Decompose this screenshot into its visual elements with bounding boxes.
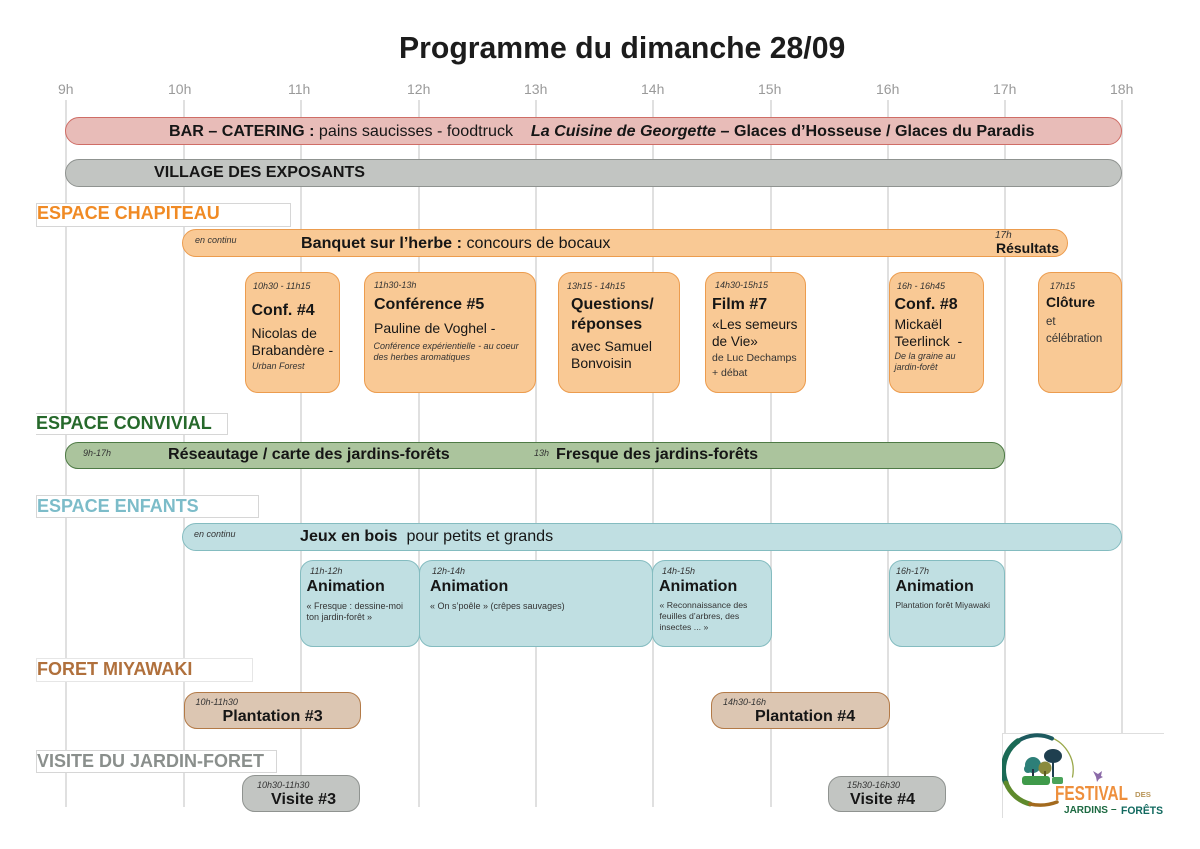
card: animation 12h: Animation — [430, 578, 508, 595]
card: animation 16h: Plantation forêt Miyawaki — [896, 600, 990, 610]
bar: jeux en bois: en continu — [194, 529, 236, 539]
heading: visite du jardin-foret: VISITE DU JARDIN-FORET — [37, 751, 264, 771]
hour labels: 14h — [641, 81, 664, 97]
heading: espace enfants — [36, 495, 259, 518]
pill: plantation 3 — [184, 692, 360, 729]
card: questions: réponses — [571, 316, 642, 333]
bar: banquet: en continu — [195, 235, 237, 245]
bar: banquet: Banquet sur l’herbe : concours de bocaux — [301, 234, 610, 252]
hour labels: 11h — [288, 81, 310, 97]
bar: jeux en bois: Jeux en bois pour petits et grands — [300, 527, 553, 545]
hour labels: 9h — [58, 81, 74, 97]
card: conf 5: des herbes aromatiques — [374, 352, 470, 362]
pill: visite 4: 15h30-16h30 — [847, 780, 900, 790]
hour labels: 16h — [876, 81, 899, 97]
logo text: JARDINS — [1064, 805, 1108, 816]
logo text: FORÊTS — [1121, 804, 1163, 817]
card: animation 12h: 12h-14h — [432, 566, 465, 576]
heading: espace enfants: ESPACE ENFANTS — [37, 496, 199, 516]
card: conf 5: Conférence expérientielle - au coeur — [374, 341, 519, 351]
heading: foret miyawaki: FORET MIYAWAKI — [37, 659, 192, 679]
bar: jeux en bois — [182, 523, 1122, 551]
card: conf 8 — [889, 272, 984, 393]
bar: village des exposants — [65, 159, 1122, 187]
heading: espace convivial: ESPACE CONVIVIAL — [36, 413, 212, 433]
bar: catering: BAR – CATERING : pains saucisses - foodtruck La Cuisine de Georgette – Glaces d’Hosseuse / Glaces du Paradis — [169, 122, 1035, 140]
card: film 7: Film #7 — [712, 296, 767, 313]
card: animation 11h: « Fresque : dessine-moi — [306, 601, 403, 611]
card: conf 5 — [364, 272, 536, 393]
icon: brush circle — [1003, 735, 1073, 805]
card: conf 4: Urban Forest — [252, 361, 305, 371]
card: conf 4 — [245, 272, 340, 393]
card: animation 12h: « On s’poêle » (crêpes sauvages) — [430, 601, 565, 611]
card: conf 8: De la graine au — [894, 351, 956, 361]
card: film 7: de Vie» — [712, 334, 758, 349]
bar: banquet: 17h — [995, 230, 1012, 241]
card: animation 16h — [889, 560, 1005, 647]
logo text: FESTIVAL — [1055, 783, 1128, 805]
card: questions: Questions/ — [571, 296, 654, 313]
bar: convivial: Réseautage / carte des jardins-forêts — [168, 445, 450, 463]
card: film 7: + débat — [712, 367, 747, 379]
card: animation 11h: ton jardin-forêt » — [306, 612, 372, 622]
pill: visite 3 — [242, 775, 360, 812]
hour labels — [58, 81, 1133, 97]
heading: espace chapiteau: ESPACE CHAPITEAU — [37, 203, 220, 223]
heading: espace chapiteau — [36, 203, 291, 227]
bar: convivial: 9h-17h — [83, 448, 111, 458]
card: film 7 — [705, 272, 806, 393]
card: cloture: 17h15 — [1050, 281, 1075, 291]
card: film 7: 14h30-15h15 — [715, 280, 768, 290]
card: animation 12h — [419, 560, 653, 647]
card: conf 8: jardin-forêt — [894, 362, 938, 372]
bar: village des exposants: VILLAGE DES EXPOSANTS — [154, 163, 365, 181]
pill: plantation 3: Plantation #3 — [222, 707, 323, 725]
card: animation 16h: Animation — [896, 578, 974, 595]
card: conf 5: Conférence #5 — [374, 296, 484, 313]
bar: convivial: Fresque des jardins-forêts — [556, 445, 758, 463]
logo: festival des jardins-forêts — [1002, 733, 1164, 818]
card: questions: 13h15 - 14h15 — [567, 281, 625, 291]
card: cloture — [1038, 272, 1122, 393]
pill: plantation 4: 14h30-16h — [723, 697, 766, 707]
card: conf 5: 11h30-13h — [374, 280, 416, 290]
card: conf 8: Conf. #8 — [894, 296, 958, 313]
card: animation 14h — [652, 560, 772, 647]
pill: visite 4 — [828, 776, 946, 812]
card: questions: Bonvoisin — [571, 355, 632, 371]
card: cloture: et — [1046, 316, 1056, 328]
card: conf 4: 10h30 - 11h15 — [253, 281, 310, 291]
card: film 7: «Les semeurs — [712, 317, 797, 332]
bar: catering — [65, 117, 1122, 145]
card: animation 11h — [300, 560, 420, 647]
pill: visite 3: Visite #3 — [271, 790, 336, 808]
icon: butterfly — [1093, 771, 1103, 782]
card: questions: avec Samuel — [571, 338, 652, 354]
card: conf 8: Teerlinck - — [894, 333, 962, 349]
card: conf 4: Nicolas de — [252, 325, 317, 341]
pill: plantation 4: Plantation #4 — [755, 707, 855, 725]
card: cloture: célébration — [1046, 333, 1102, 345]
logo text — [1055, 783, 1163, 817]
icon: trees — [1022, 749, 1063, 785]
hour labels: 10h — [168, 81, 191, 97]
pill: plantation 4 — [711, 692, 890, 729]
logo text: DES — [1135, 790, 1151, 799]
card: animation 14h: feuilles d’arbres, des — [660, 611, 739, 621]
bar: convivial — [65, 442, 1005, 469]
card: animation 14h: « Reconnaissance des — [660, 600, 747, 610]
card: conf 4: Brabandère - — [252, 342, 333, 358]
card: animation 14h: insectes ... » — [660, 622, 708, 632]
hour labels: 18h — [1110, 81, 1133, 97]
card: conf 4: Conf. #4 — [252, 302, 315, 319]
card: questions — [558, 272, 680, 393]
card: conf 8: Mickaël — [894, 316, 942, 332]
card: cloture: Clôture — [1046, 294, 1095, 310]
hour labels: 13h — [524, 81, 547, 97]
heading: foret miyawaki — [36, 658, 253, 682]
hour labels: 17h — [993, 81, 1016, 97]
card: conf 8: 16h - 16h45 — [897, 281, 945, 291]
card: animation 11h: 11h-12h — [310, 566, 342, 576]
logo text: – — [1111, 804, 1117, 815]
bar: banquet: Résultats — [996, 240, 1059, 256]
card: animation 11h: Animation — [306, 578, 385, 595]
pill: plantation 3: 10h-11h30 — [196, 697, 238, 707]
card: animation 14h: Animation — [659, 578, 737, 595]
pill: visite 3: 10h30-11h30 — [257, 780, 309, 790]
hour labels: 15h — [758, 81, 781, 97]
card: conf 5: Pauline de Voghel - — [374, 320, 495, 336]
card: animation 14h: 14h-15h — [662, 566, 695, 576]
bar: convivial: 13h — [534, 448, 549, 458]
pill: visite 4: Visite #4 — [850, 790, 915, 808]
card: animation 16h: 16h-17h — [896, 566, 929, 576]
title: Programme du dimanche 28/09 — [399, 32, 845, 65]
card: film 7: de Luc Dechamps — [712, 352, 797, 364]
bar: banquet — [182, 229, 1068, 257]
hour labels: 12h — [407, 81, 430, 97]
